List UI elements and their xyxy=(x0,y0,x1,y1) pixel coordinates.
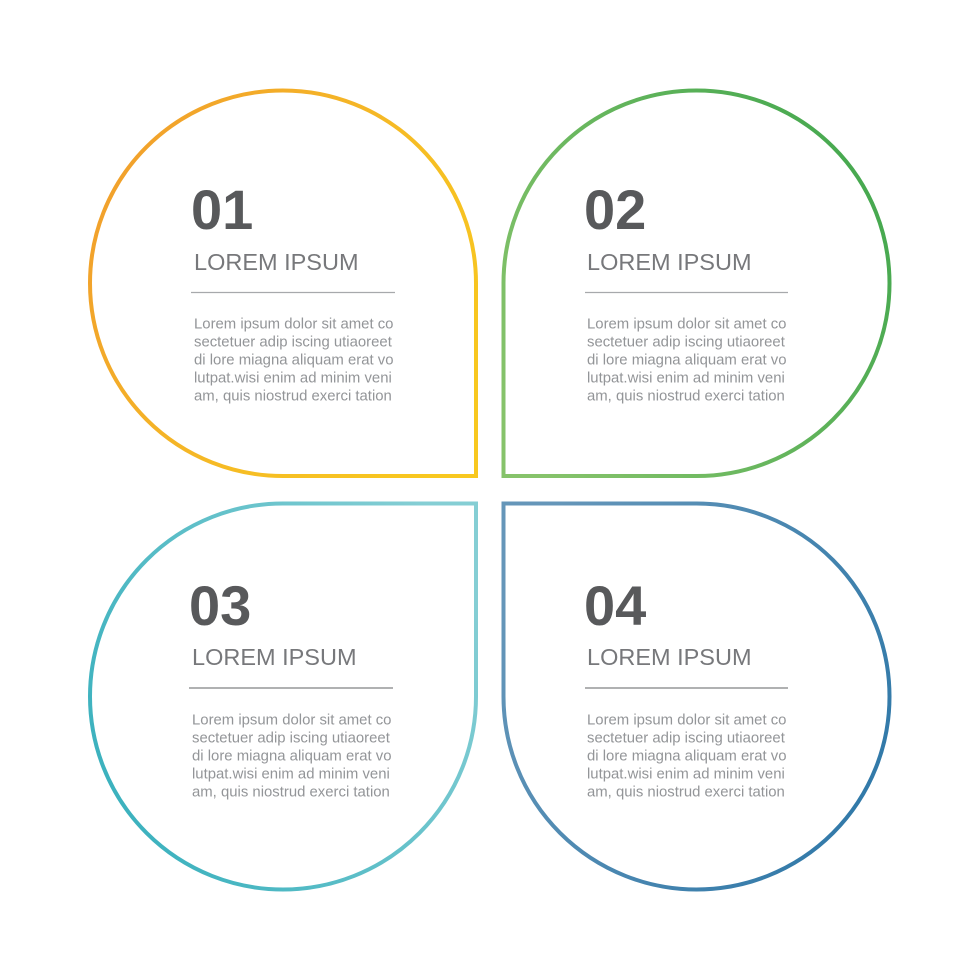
body text 01: Lorem ipsum dolor sit amet co xyxy=(194,316,393,332)
body text 03: di lore miagna aliquam erat vo xyxy=(192,748,391,764)
body text 02 xyxy=(587,316,786,404)
body text 03 xyxy=(192,712,391,800)
heading 01: LOREM IPSUM xyxy=(194,249,359,275)
teardrop outline 03 xyxy=(90,504,476,890)
heading 03: LOREM IPSUM xyxy=(192,644,357,670)
body text 03: sectetuer adip iscing utiaoreet xyxy=(192,730,391,746)
heading 02: LOREM IPSUM xyxy=(587,249,752,275)
body text 04: di lore miagna aliquam erat vo xyxy=(587,748,786,764)
body text 03: am, quis niostrud exerci tation xyxy=(192,784,390,800)
panel: 03 xyxy=(90,504,476,890)
body text 01: sectetuer adip iscing utiaoreet xyxy=(194,334,393,350)
number 04: 04 xyxy=(584,574,646,637)
heading 04: LOREM IPSUM xyxy=(587,644,752,670)
panel: 04 xyxy=(504,504,890,890)
body text 04: am, quis niostrud exerci tation xyxy=(587,784,785,800)
body text 02: am, quis niostrud exerci tation xyxy=(587,388,785,404)
number 03: 03 xyxy=(189,574,251,637)
body text 01: am, quis niostrud exerci tation xyxy=(194,388,392,404)
body text 03: Lorem ipsum dolor sit amet co xyxy=(192,712,391,728)
body text 04: sectetuer adip iscing utiaoreet xyxy=(587,730,786,746)
body text 02: lutpat.wisi enim ad minim veni xyxy=(587,370,785,386)
body text 01 xyxy=(194,316,393,404)
panel: 01 xyxy=(90,90,476,476)
body text 04: Lorem ipsum dolor sit amet co xyxy=(587,712,786,728)
teardrop outline 02 xyxy=(504,90,890,476)
body text 03: lutpat.wisi enim ad minim veni xyxy=(192,766,390,782)
panel: 02 xyxy=(504,90,890,476)
body text 01: di lore miagna aliquam erat vo xyxy=(194,352,393,368)
number 01: 01 xyxy=(191,178,253,241)
body text 01: lutpat.wisi enim ad minim veni xyxy=(194,370,392,386)
body text 04 xyxy=(587,712,786,800)
body text 02: di lore miagna aliquam erat vo xyxy=(587,352,786,368)
body text 02: sectetuer adip iscing utiaoreet xyxy=(587,334,786,350)
teardrop outline 01 xyxy=(90,90,476,476)
number 02: 02 xyxy=(584,178,646,241)
body text 02: Lorem ipsum dolor sit amet co xyxy=(587,316,786,332)
teardrop outline 04 xyxy=(504,504,890,890)
body text 04: lutpat.wisi enim ad minim veni xyxy=(587,766,785,782)
